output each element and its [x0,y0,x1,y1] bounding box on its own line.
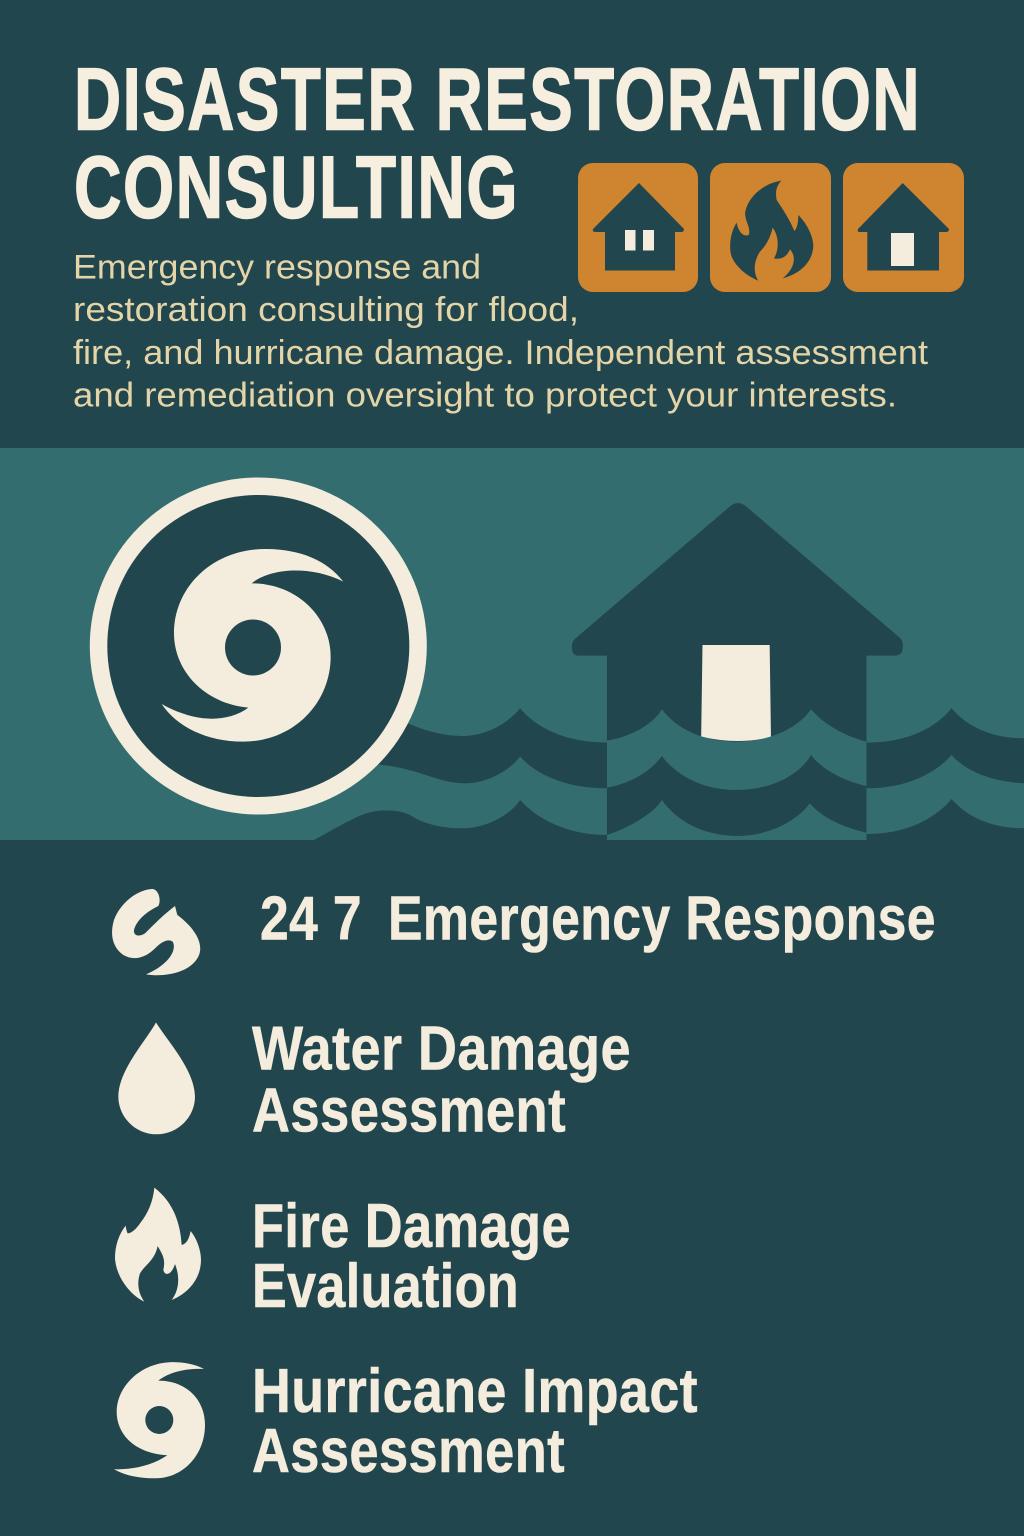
item: fire damage evaluation: Fire Damage [252,1192,571,1261]
item: hurricane impact assessment: Hurricane Impact [252,1357,698,1426]
subtitle text block: Emergency response and [73,248,481,286]
illustration band: flood background [0,448,1024,840]
icon tile: house with door [843,163,964,292]
door [701,645,771,741]
title [74,50,921,236]
item: fire damage evaluation: Evaluation [252,1252,519,1321]
flooded house [572,503,903,840]
hurricane emblem [90,478,427,814]
subtitle text block: fire, and hurricane damage. Independent assessment [73,334,929,372]
item: hurricane impact assessment: Assessment [252,1417,565,1486]
subtitle text block: and remediation oversight to protect your interests. [73,376,897,414]
icon tile: house with windows [578,163,698,292]
item: 24/7 emergency response: 24 7 [260,884,362,954]
item: water damage assessment: Assessment [252,1076,566,1146]
subtitle text block: restoration consulting for flood, [73,291,579,329]
item: fire damage evaluation [115,1188,571,1321]
icon tile: flame [710,163,831,292]
icon: hurricane [114,1362,205,1478]
flood waves [314,708,1024,840]
item: hurricane impact assessment [114,1357,698,1486]
subtitle text block [73,248,929,414]
item: 24/7 emergency response [112,884,936,975]
item: water damage assessment [118,1014,631,1146]
icon: swirl [112,889,200,975]
title: CONSULTING [74,138,519,236]
item: water damage assessment: Water Damage [252,1014,631,1084]
icon: water drop [118,1022,195,1134]
icon: flame [115,1188,201,1302]
